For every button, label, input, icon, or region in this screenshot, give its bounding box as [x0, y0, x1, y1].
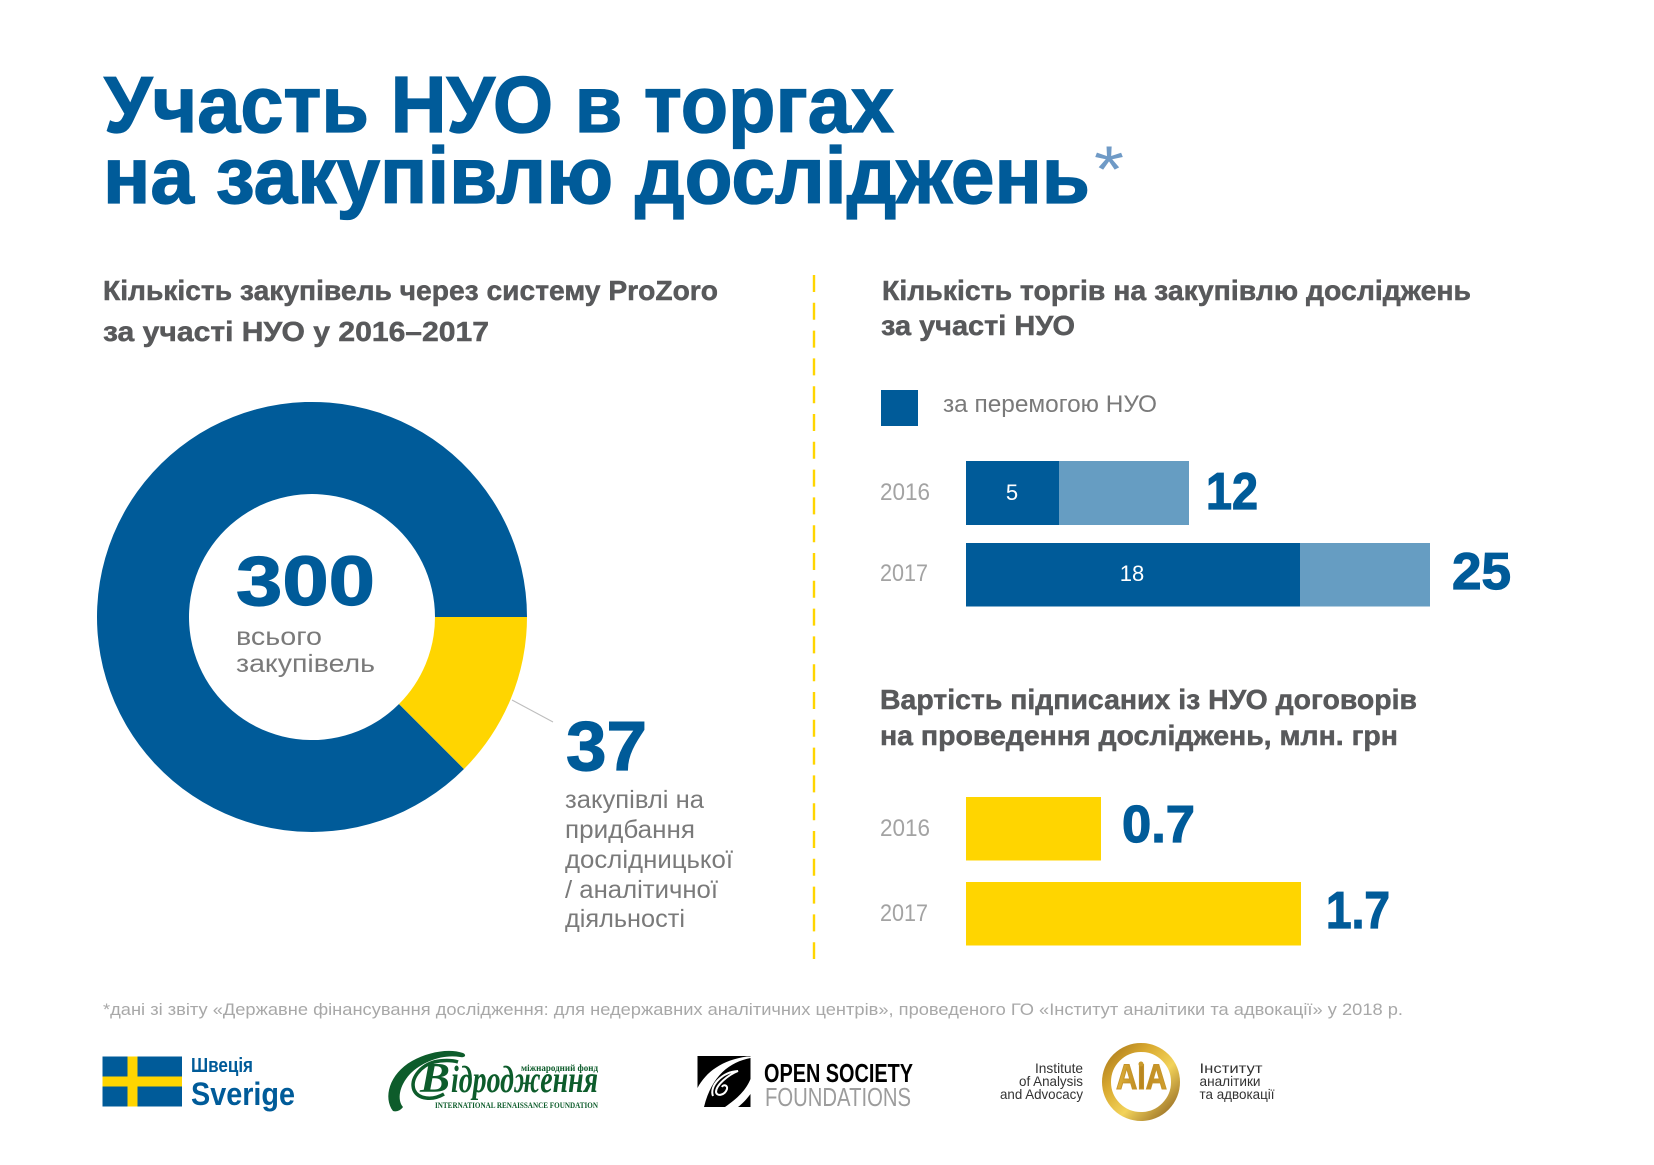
panel: donut chart: [97, 402, 733, 933]
title: на закупівлю досліджень: [103, 131, 1090, 220]
title: *: [1094, 132, 1124, 206]
logo: International Renaissance Foundation: [388, 1051, 599, 1111]
row: 2017: [880, 543, 1511, 606]
heading: procurements through ProZorro: за участі НУО у 2016–2017: [103, 316, 489, 347]
row: 2016: [880, 796, 1195, 860]
heading: procurements through ProZorro: [103, 275, 718, 347]
ukrainian name: [1200, 1060, 1275, 1102]
research caption: [565, 786, 733, 933]
heading: number of tenders: [881, 275, 1471, 341]
bar chart: contract value: [880, 796, 1390, 946]
ukrainian name: аналітики: [1200, 1073, 1260, 1089]
logo: International Renaissance Foundation: В: [419, 1056, 450, 1102]
logo: Open Society Foundations: [698, 1056, 913, 1112]
total value: 300: [236, 542, 375, 620]
footnote: *дані зі звіту «Державне фінансування дослідження: для недержавних аналітичних центрів», проведеного ГО «Інститут аналітики та адвокації» у 2018 р.: [103, 1000, 1403, 1019]
research caption: придбання: [565, 816, 695, 844]
ukrainian name: Інститут: [1200, 1060, 1263, 1076]
english name: of Analysis: [1019, 1073, 1083, 1089]
title: [103, 60, 1124, 220]
research caption: діяльності: [565, 905, 685, 933]
gold ring emblem: [1106, 1048, 1176, 1116]
logo: Open Society Foundations: FOUNDATIONS: [765, 1082, 911, 1112]
title: Участь НУО в торгах: [104, 60, 894, 149]
row: 2017: [880, 882, 1390, 946]
research caption: закупівлі на: [565, 786, 704, 814]
total caption: всього: [236, 623, 322, 651]
heading: contract value: [880, 684, 1417, 751]
ukrainian name: та адвокації: [1200, 1086, 1275, 1102]
heading: procurements through ProZorro: Кількість закупівель через систему ProZoro: [103, 275, 718, 306]
total caption: закупівель: [236, 650, 375, 678]
row: 2017: 18: [1120, 561, 1144, 586]
logo: Sweden: Sverige: [191, 1076, 295, 1112]
english name: [1000, 1060, 1083, 1102]
total caption: [236, 623, 375, 678]
logo: Open Society Foundations: OPEN SOCIETY: [764, 1058, 913, 1088]
heading: contract value: на проведення досліджень, млн. грн: [880, 720, 1398, 751]
legend: за перемогою НУО: [943, 391, 1157, 418]
row: 2016: [880, 461, 1258, 525]
row: 2017: 2017: [880, 900, 928, 927]
donut: total procurements: [97, 402, 527, 832]
row: 2017: 25: [1452, 543, 1511, 601]
row: 2017: 1.7: [1326, 882, 1390, 940]
heading: contract value: Вартість підписаних із НУО договорів: [880, 684, 1417, 715]
row: 2017: 2017: [880, 560, 928, 587]
research caption: дослідницької: [565, 846, 733, 874]
row: 2016: 2016: [880, 479, 930, 506]
heading: number of tenders: Кількість торгів на закупівлю досліджень: [882, 275, 1471, 306]
gold ring emblem: AIA: [1116, 1058, 1167, 1097]
logo: International Renaissance Foundation: ідродження: [451, 1059, 598, 1101]
english name: and Advocacy: [1000, 1086, 1083, 1102]
english name: Institute: [1035, 1060, 1083, 1076]
row: 2016: 5: [1006, 480, 1018, 505]
logo: Sweden: [102, 1055, 295, 1112]
research value: 37: [566, 707, 647, 785]
logo: Institute of Analysis and Advocacy: [1000, 1048, 1275, 1116]
bar chart: tenders: [880, 461, 1511, 606]
leader line: [512, 700, 553, 722]
donut: research procurements: [399, 617, 527, 769]
logo: International Renaissance Foundation: міжнародний фонд: [521, 1063, 598, 1074]
heading: number of tenders: за участі НУО: [881, 310, 1075, 341]
legend: [881, 390, 1157, 426]
logo: International Renaissance Foundation: INTERNATIONAL RENAISSANCE FOUNDATION: [435, 1100, 599, 1110]
logo: Sweden: Швеція: [191, 1055, 253, 1077]
research caption: / аналітичної: [565, 876, 718, 904]
row: 2016: 0.7: [1122, 796, 1195, 854]
row: 2016: 12: [1206, 463, 1258, 521]
row: 2016: 2016: [880, 815, 930, 842]
